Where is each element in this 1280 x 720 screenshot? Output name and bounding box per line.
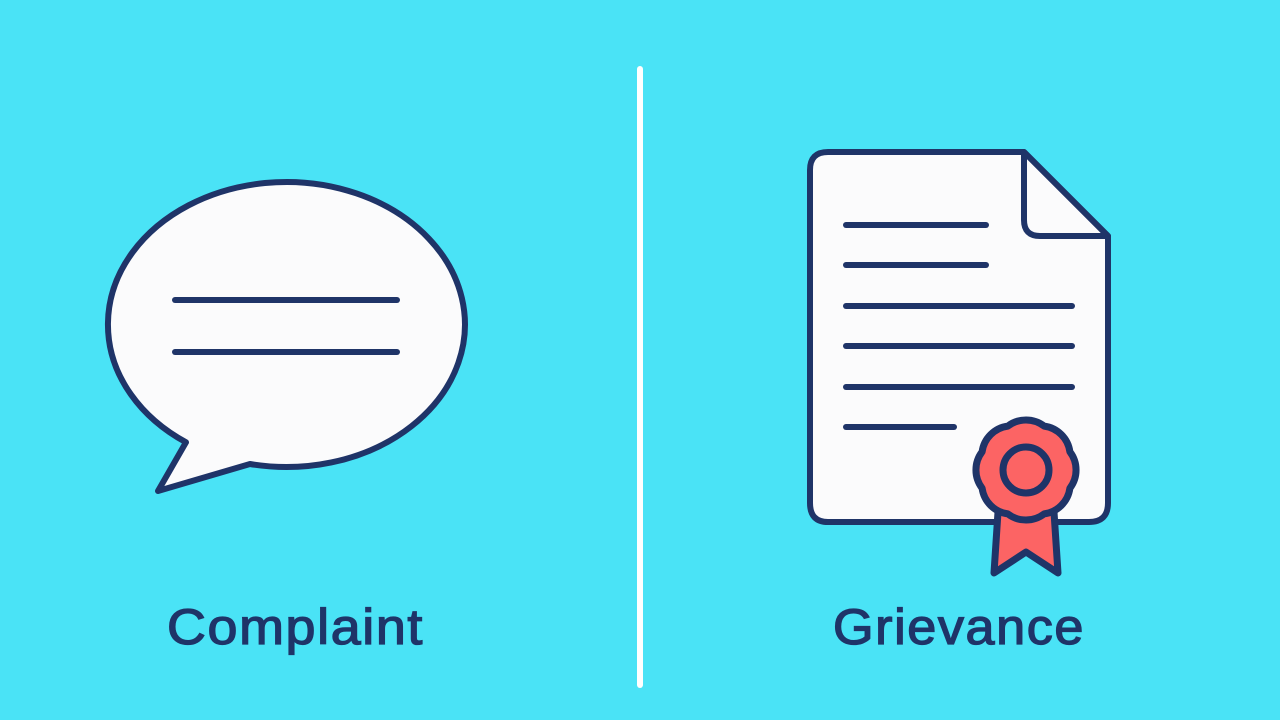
seal body: [976, 420, 1076, 520]
label: Complaint: Complaint: [167, 599, 424, 655]
icon: rosette seal: [976, 420, 1076, 520]
icon: certificate document: [810, 152, 1108, 573]
label: Grievance: Grievance: [833, 599, 1085, 655]
folded corner: [1024, 152, 1108, 236]
icon: award ribbon: [994, 512, 1058, 573]
icon: speech bubble: [108, 182, 465, 491]
document text lines: [846, 225, 1072, 427]
panel: complaint: [108, 182, 465, 655]
bubble outline: [108, 182, 465, 491]
document sheet: [810, 152, 1108, 522]
bubble text lines: [175, 300, 397, 352]
divider: [637, 66, 643, 688]
seal inner ring: [1003, 447, 1049, 493]
panel: grievance: [810, 152, 1108, 655]
